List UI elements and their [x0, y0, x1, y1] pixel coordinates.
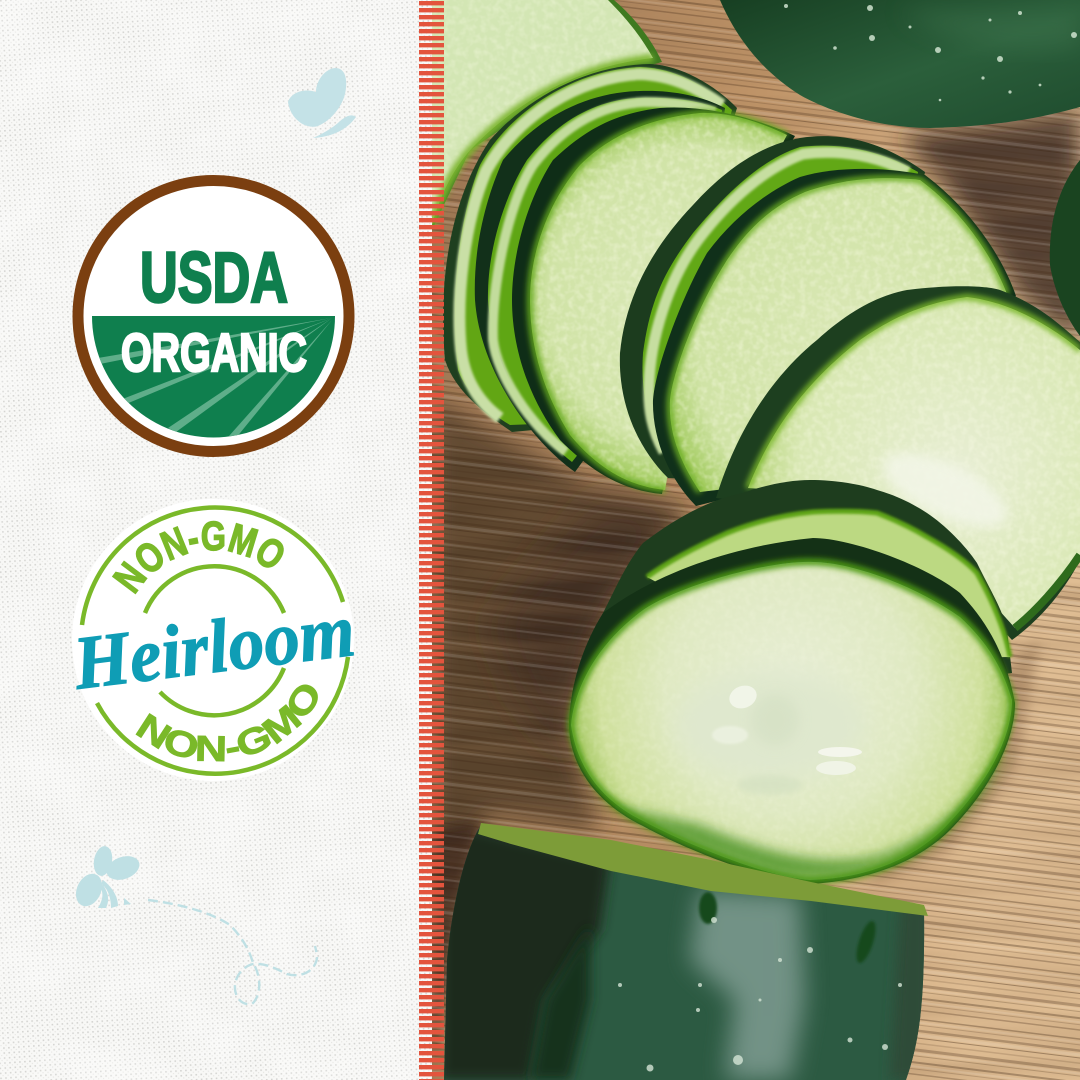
slice I: front slice — [569, 538, 1015, 884]
USDA wordmark: USDA — [140, 239, 288, 318]
Heirloom Non-GMO badge — [68, 499, 359, 781]
red striped divider — [419, 0, 444, 1080]
ORGANIC wordmark: ORGANIC — [121, 323, 307, 383]
bee flight trail — [148, 900, 317, 1004]
green field — [90, 316, 338, 441]
cucumber: top right whole piece — [720, 0, 1080, 128]
slice A — [432, 0, 662, 230]
slice D — [512, 107, 795, 494]
wooden cutting board — [432, 0, 1080, 1080]
icon: bee — [71, 845, 143, 910]
panel: cucumber photo — [432, 0, 1080, 1080]
cucumber: right edge piece — [1050, 160, 1080, 336]
icon: butterfly — [288, 68, 356, 138]
slice F — [653, 169, 1016, 506]
slice C — [475, 91, 725, 472]
panel: linen background — [0, 0, 432, 1080]
glossy highlight — [690, 890, 805, 1080]
outer ring upper arc — [82, 508, 343, 625]
cut cucumber: bottom piece — [440, 810, 930, 1080]
water droplets — [618, 917, 902, 1072]
outer ring lower arc — [97, 657, 348, 774]
slice G — [716, 286, 1080, 640]
slice H — [603, 480, 1014, 674]
cut edge — [478, 823, 928, 916]
slice B — [443, 64, 737, 432]
inner ring lower arc — [160, 668, 284, 715]
script wordmark: Heirloom — [68, 588, 359, 706]
bottom label: NON-GMO — [136, 684, 318, 762]
inner ring upper arc — [145, 566, 284, 613]
dark left side — [440, 820, 610, 1080]
seed cluster — [694, 679, 862, 794]
top label: NON-GMO — [112, 520, 284, 594]
USDA Organic badge — [78, 180, 349, 452]
slice E — [620, 136, 925, 480]
droplets — [784, 4, 1077, 101]
